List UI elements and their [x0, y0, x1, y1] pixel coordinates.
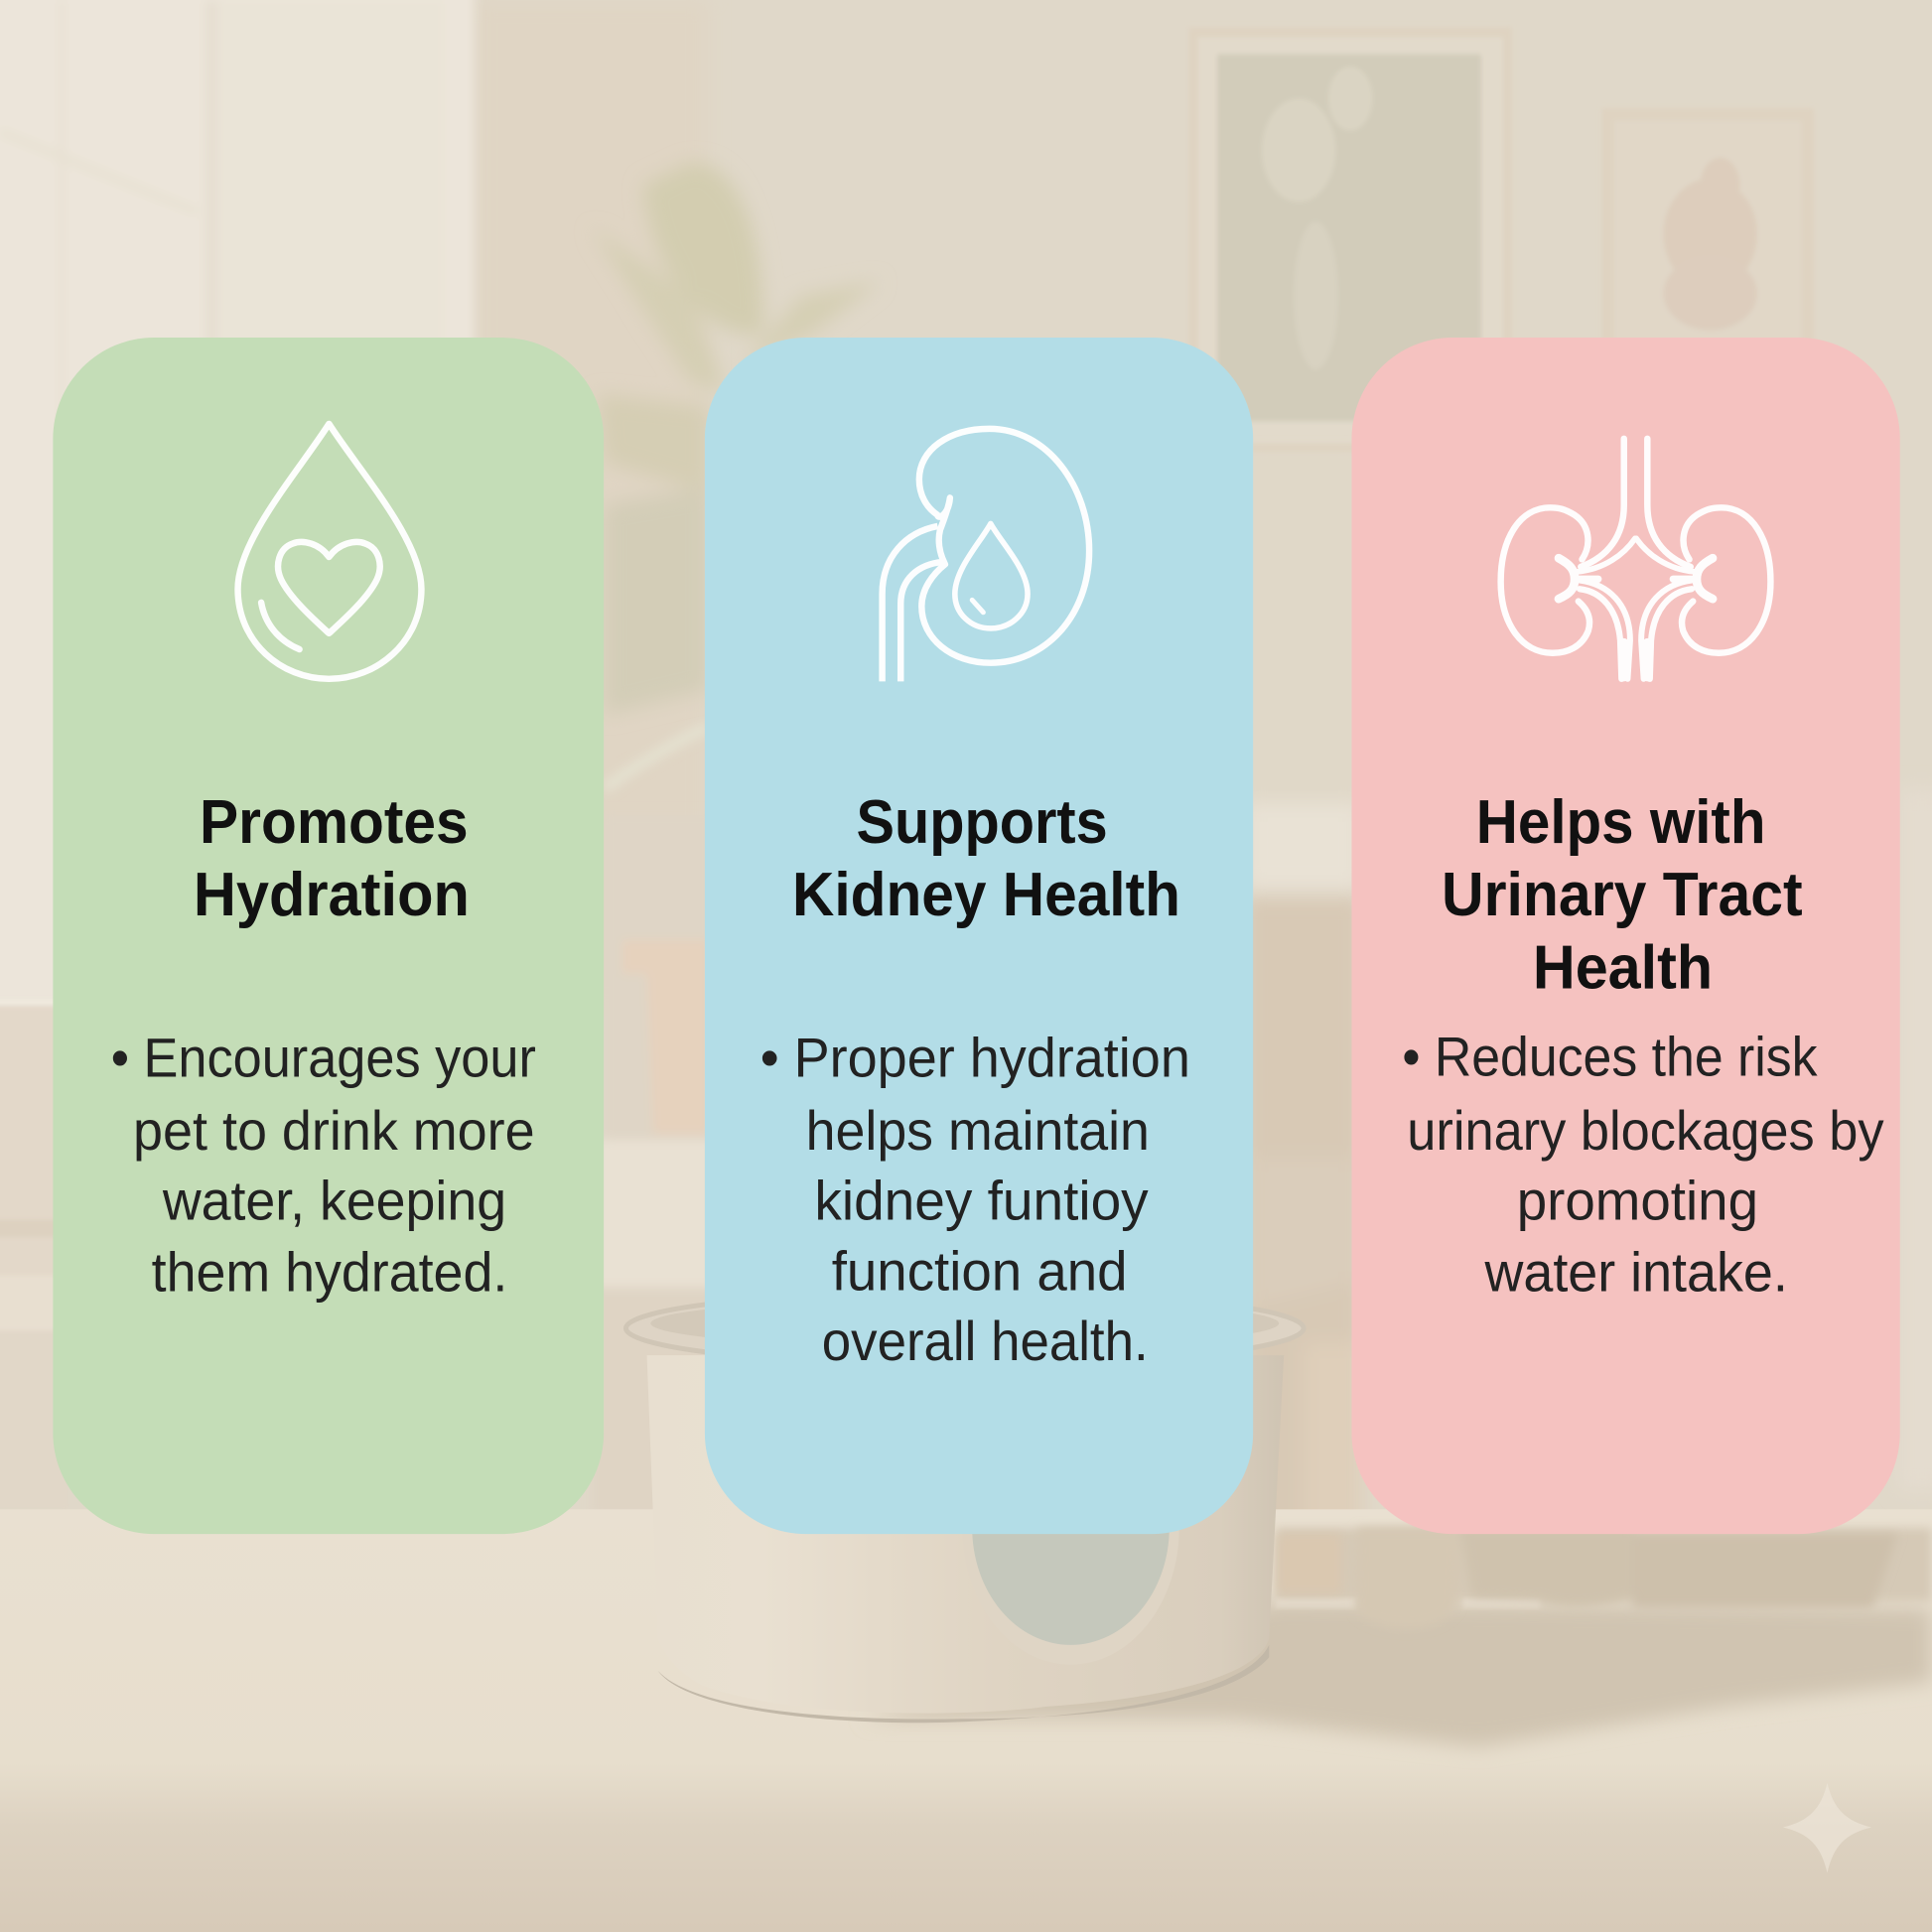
heading: supports kidney health: Kidney Health	[792, 861, 1180, 929]
heading: urinary tract health: Helps with	[1476, 788, 1765, 857]
text: urinary description: • Reduces the risk	[1402, 1025, 1818, 1087]
side table and pot	[592, 813, 715, 1516]
plant	[592, 163, 881, 715]
cat paws	[1278, 1528, 1897, 1629]
framed pictures	[1189, 27, 1814, 452]
text: kidney description: function and	[832, 1239, 1128, 1302]
icon: water drop with heart	[238, 424, 421, 679]
text: urinary description	[1402, 1025, 1884, 1304]
text: urinary description: water intake.	[1484, 1241, 1788, 1304]
text: kidney description: • Proper hydration	[760, 1027, 1190, 1089]
panel: promotes hydration	[53, 338, 604, 1534]
heading: urinary tract health	[1442, 788, 1803, 1002]
text: kidney description: helps maintain	[806, 1099, 1150, 1162]
heading: promotes hydration	[194, 788, 470, 929]
text: hydration description	[111, 1027, 536, 1304]
window	[0, 0, 475, 1004]
heading: urinary tract health: Urinary Tract	[1442, 861, 1803, 929]
heading: promotes hydration: Promotes	[200, 788, 469, 857]
heading: supports kidney health: Supports	[857, 788, 1108, 857]
icon: kidneys and urinary tract	[1501, 439, 1770, 679]
text: kidney description	[760, 1027, 1190, 1372]
text: urinary description: urinary blockages by	[1407, 1099, 1884, 1162]
text: hydration description: them hydrated.	[152, 1241, 507, 1304]
heading: supports kidney health	[792, 788, 1180, 929]
heading: promotes hydration: Hydration	[194, 861, 470, 929]
text: hydration description: pet to drink more	[133, 1099, 535, 1162]
text: urinary description: promoting	[1517, 1170, 1758, 1232]
text: hydration description: water, keeping	[162, 1170, 506, 1232]
panel: supports kidney health	[705, 338, 1253, 1534]
icon: kidney with water drop	[883, 429, 1089, 681]
text: hydration description: • Encourages your	[111, 1027, 536, 1089]
panel: urinary tract health	[1351, 338, 1900, 1534]
icon: sparkle watermark	[1783, 1783, 1871, 1872]
floor shadow	[863, 1601, 1932, 1747]
text: kidney description: overall health.	[822, 1310, 1149, 1372]
dark wall base behind cat	[1276, 1528, 1932, 1601]
left wall bands	[0, 1000, 68, 1509]
heading: urinary tract health: Health	[1533, 933, 1713, 1002]
sofa and cat	[1244, 459, 1932, 1563]
fountain bowl	[625, 1292, 1304, 1723]
text: kidney description: kidney funtioy	[814, 1170, 1149, 1232]
